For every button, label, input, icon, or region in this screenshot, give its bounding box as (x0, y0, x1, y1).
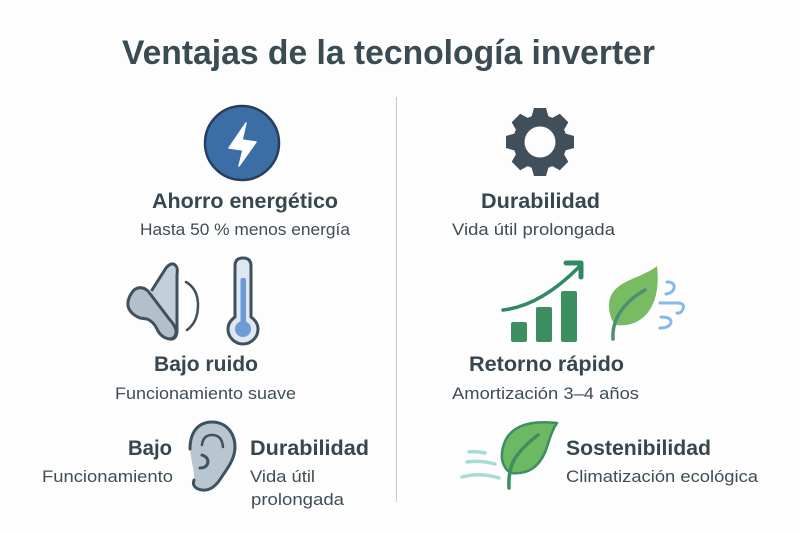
panel: durabilidad (inferior) (250, 437, 369, 509)
icon: lightning bolt (205, 106, 279, 180)
text: vida útil prolongada (250, 467, 345, 509)
text: funcionamiento: Funcionamiento (42, 467, 173, 486)
icon: leaf with wind (609, 266, 684, 339)
panel: bajo (42, 437, 173, 486)
icon: ear (190, 422, 235, 490)
text: amortización: Amortización 3–4 años (452, 384, 639, 403)
icon: thermometer (228, 258, 258, 344)
panel: durabilidad (superior) (452, 108, 616, 239)
icon: speaker (128, 264, 198, 339)
panel: sostenibilidad (462, 422, 759, 488)
heading: durabilidad: Durabilidad (481, 190, 600, 213)
heading: ahorro energético: Ahorro energético (152, 190, 338, 213)
heading: bajo: Bajo (128, 437, 172, 460)
text: funcionamiento suave: Funcionamiento suave (115, 384, 296, 403)
heading: bajo ruido: Bajo ruido (154, 353, 258, 376)
heading: retorno rápido: Retorno rápido (469, 353, 624, 376)
text: hasta 50 %: Hasta 50 % menos energía (140, 220, 351, 239)
text: climatización ecológica: Climatización ecológica (566, 467, 759, 486)
panel: bajo ruido (115, 258, 296, 403)
icon: gear (506, 108, 574, 176)
heading: sostenibilidad: Sostenibilidad (566, 437, 711, 460)
panel: retorno rápido (452, 263, 684, 403)
panel: ahorro energético (140, 106, 351, 239)
icon: leaf with breeze (462, 422, 557, 488)
text: vida útil prolongada: prolongada (251, 490, 345, 509)
icon: rising bar chart (503, 263, 581, 342)
text: vida útil prolongada: Vida útil (250, 467, 315, 486)
title: Ventajas de la tecnología inverter (122, 34, 655, 72)
text: vida útil prolongada: Vida útil prolongada (452, 220, 616, 239)
heading: durabilidad: Durabilidad (250, 437, 369, 460)
